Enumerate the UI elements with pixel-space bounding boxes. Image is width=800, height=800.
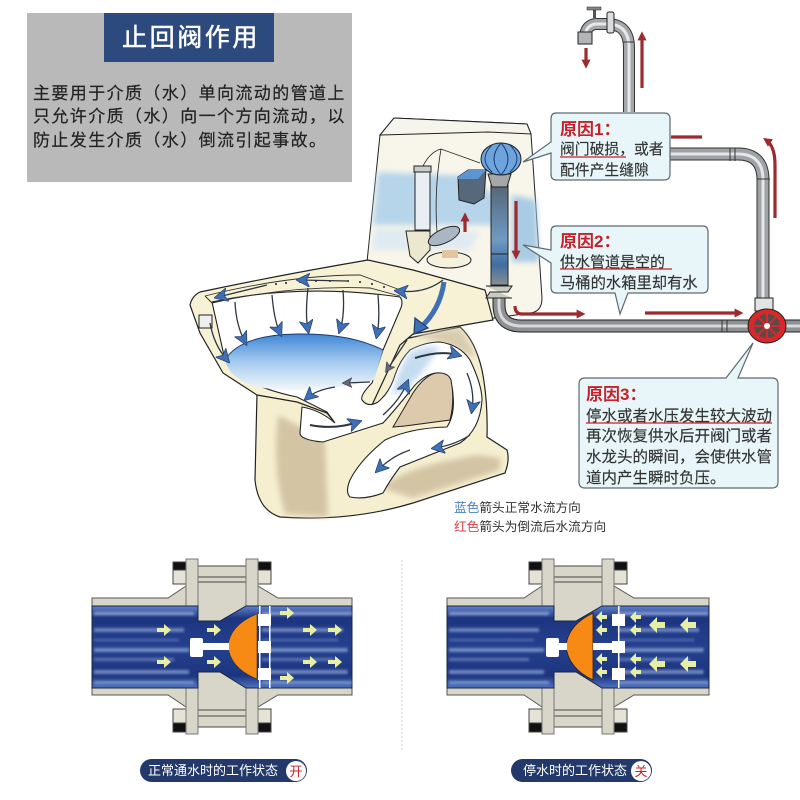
text block: intro description: [33, 84, 346, 150]
bolts: [173, 562, 271, 732]
rim cream body: [190, 260, 493, 423]
illustration: toilet cross-section: [190, 118, 542, 518]
label: open state: 开: [290, 764, 303, 779]
legend: arrow colours: [454, 500, 606, 534]
diagram: valve open: [92, 559, 352, 734]
heading: title bar: 止回阀作用: [122, 24, 260, 52]
flow arrows: [157, 607, 342, 684]
icon: red stop valve: [748, 298, 786, 343]
callout: reason 1: [523, 113, 670, 180]
callout: reason 3: 水龙头的瞬间，会使供水管: [586, 448, 772, 466]
legend: arrow colours: 红色箭头为倒流后水流方向: [454, 519, 606, 534]
bolts: [529, 562, 627, 732]
text block: intro description: 只允许介质（水）向一个方向流动，以: [33, 107, 346, 126]
callout: reason 1: 阀门破损，或者: [560, 141, 664, 158]
rim channel: [205, 275, 403, 303]
heading: title bar: [104, 13, 274, 62]
callout: reason 2: 供水管道是空的: [560, 254, 665, 271]
blue flow arrows: [210, 280, 473, 470]
flush mechanism: [406, 149, 486, 268]
callout: reason 3: 原因3：: [586, 385, 646, 404]
panel: intro grey box: [27, 13, 352, 182]
water channel: [447, 606, 709, 688]
label: open state: 正常通水时的工作状态: [148, 763, 278, 778]
label: closed state: 停水时的工作状态: [523, 763, 627, 778]
rim dots: [213, 280, 385, 303]
toilet base: [255, 327, 508, 518]
tank supply pipe and float ball: [481, 143, 521, 298]
trapway and bowl interior: [212, 291, 482, 498]
label: closed state: [511, 759, 652, 782]
label: closed state: 关: [634, 764, 648, 779]
legend: arrow colours: 蓝色箭头正常水流方向: [454, 500, 581, 515]
callout: reason 3: 停水或者水压发生较大波动: [586, 407, 772, 425]
callout: reason 2: 原因2：: [560, 232, 620, 251]
label: open state: [140, 759, 307, 782]
text block: intro description: 防止发生介质（水）倒流引起事故。: [33, 131, 327, 150]
water channel: [92, 606, 352, 688]
callout: reason 3: 道内产生瞬时负压。: [586, 469, 726, 487]
diagram: valve closed: [447, 559, 709, 734]
tank: [367, 118, 542, 320]
red backflow arrows: [465, 35, 775, 314]
callout: reason 2: [523, 226, 708, 314]
tan island: [393, 373, 453, 427]
callout: reason 2: 马桶的水箱里却有水: [560, 275, 698, 292]
water pipes: [499, 24, 800, 332]
flow arrows: [596, 611, 696, 678]
callout: reason 3: [579, 343, 778, 488]
icon: faucet: [578, 7, 614, 44]
callout: reason 3: 再次恢复供水后开阀门或者: [586, 427, 772, 445]
callout: reason 1: 配件产生缝隙: [560, 162, 649, 179]
water: [225, 334, 383, 390]
text block: intro description: 主要用于介质（水）单向流动的管道上: [33, 84, 346, 103]
callout: reason 1: 原因1：: [560, 120, 620, 139]
